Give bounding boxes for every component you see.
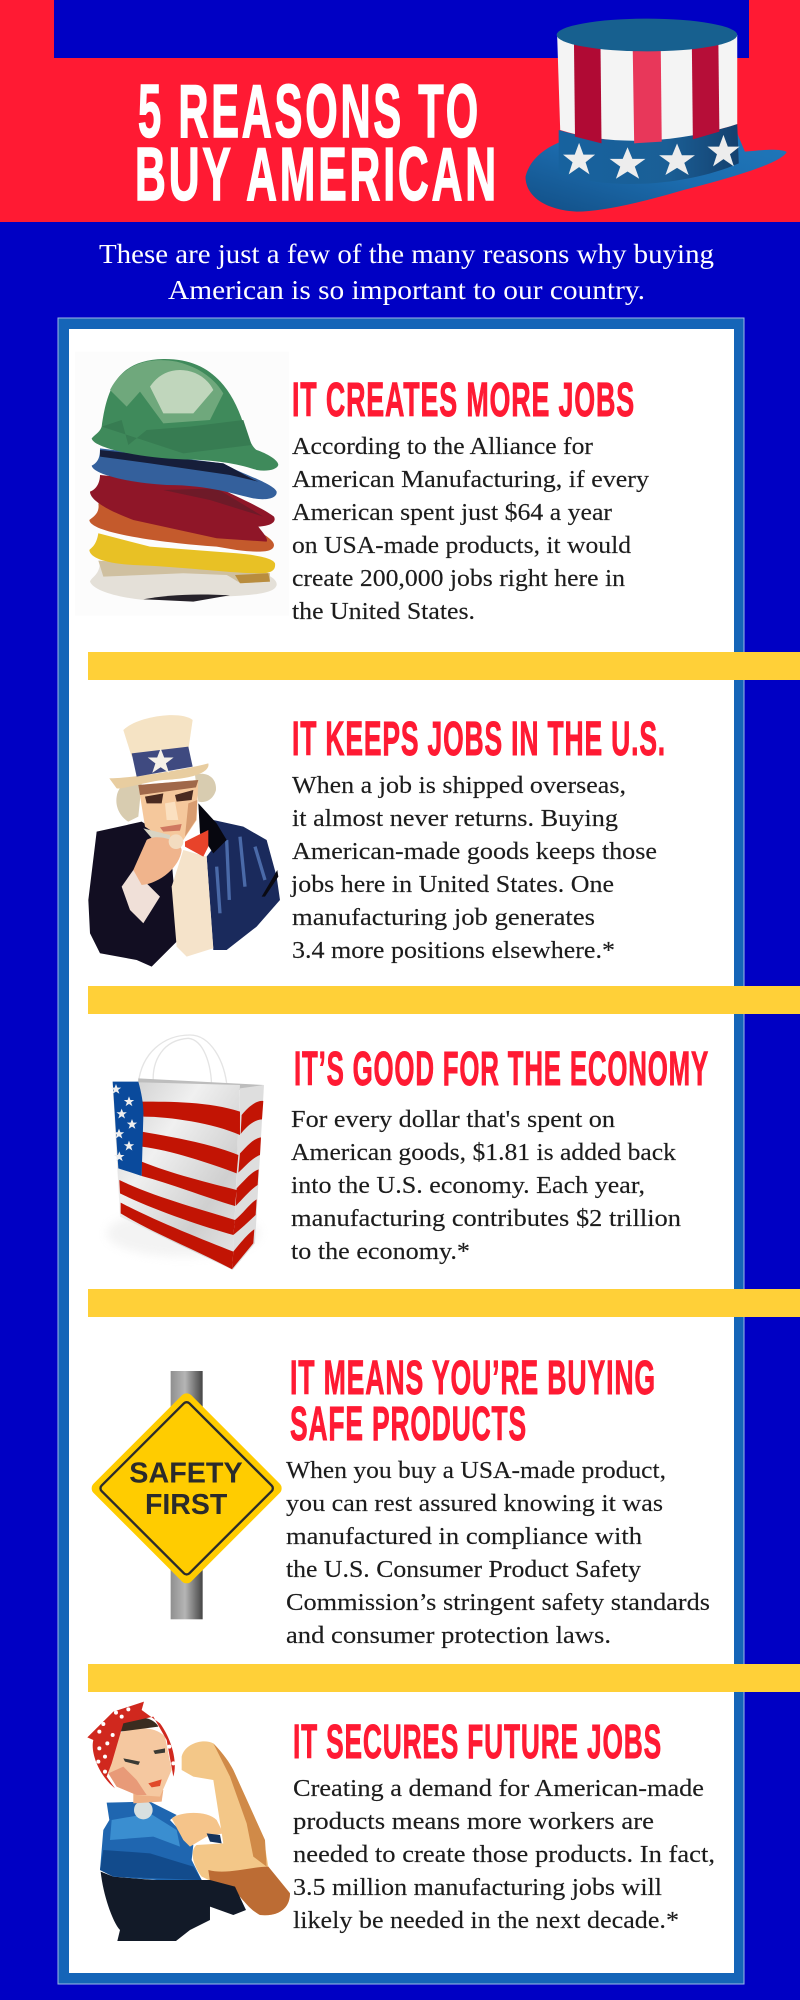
body text: to the economy.* (291, 1238, 470, 1265)
body text: American spent just $64 a year (292, 499, 612, 526)
body text: jobs here in United States. One (290, 871, 614, 898)
body text: likely be needed in the next decade.* (293, 1907, 679, 1934)
body text: Creating a demand for American-made (293, 1775, 704, 1802)
body text: create 200,000 jobs right here in (292, 565, 625, 592)
icon: safety first road sign: SAFETY (129, 1458, 243, 1490)
section 5: future jobs (87, 1702, 715, 1941)
body text: manufacturing job generates (292, 904, 595, 931)
body text: When you buy a USA-made product, (286, 1457, 666, 1484)
body text: you can rest assured knowing it was (286, 1490, 663, 1517)
section 3: economy (107, 1035, 709, 1270)
title (135, 69, 499, 216)
body text: products means more workers are (293, 1808, 654, 1835)
icon: uncle sam top hat (526, 19, 787, 212)
icon: american flag shopping bag (107, 1035, 264, 1270)
heading (290, 1352, 656, 1451)
body text: For every dollar that's spent on (291, 1106, 615, 1133)
icon: safety first road sign: FIRST (145, 1489, 228, 1521)
body text (293, 1775, 715, 1934)
intro text (99, 239, 714, 305)
title: BUY AMERICAN (135, 132, 499, 216)
panel: white content card (58, 318, 744, 1984)
body text: According to the Alliance for (292, 433, 593, 460)
body text: it almost never returns. Buying (292, 805, 618, 832)
body text: and consumer protection laws. (286, 1622, 611, 1649)
intro text: These are just a few of the many reasons why buying (99, 239, 714, 269)
icon: safety first road sign (98, 1371, 275, 1619)
section 4: safe products (98, 1352, 710, 1649)
section 2: keeps jobs (88, 713, 666, 967)
divider bar 2 (88, 986, 800, 1014)
body text: the U.S. Consumer Product Safety (286, 1556, 642, 1583)
header banner (0, 0, 800, 222)
icon: uncle sam (88, 715, 280, 967)
body text (286, 1457, 710, 1649)
body text: manufactured in compliance with (286, 1523, 642, 1550)
body text: on USA-made products, it would (292, 532, 631, 559)
icon: stacked hard hats (75, 352, 289, 616)
body text: needed to create those products. In fact, (293, 1841, 715, 1868)
body text: American goods, $1.81 is added back (291, 1139, 677, 1166)
body text: into the U.S. economy. Each year, (291, 1172, 645, 1199)
divider bar 1 (88, 652, 800, 680)
section 1: more jobs (75, 352, 650, 625)
body text: American-made goods keeps those (292, 838, 657, 865)
title: 5 REASONS TO (138, 69, 481, 153)
body text: 3.4 more positions elsewhere.* (292, 937, 615, 964)
body text: Commission’s stringent safety standards (286, 1589, 710, 1616)
heading: SAFE PRODUCTS (290, 1398, 527, 1451)
body text: When a job is shipped overseas, (292, 772, 626, 799)
divider bar 4 (88, 1664, 800, 1692)
body text: 3.5 million manufacturing jobs will (293, 1874, 662, 1901)
body text (290, 772, 657, 964)
divider bar 3 (88, 1289, 800, 1317)
body text: manufacturing contributes $2 trillion (291, 1205, 681, 1232)
body text (291, 1106, 681, 1265)
icon: rosie the riveter (87, 1702, 290, 1941)
intro text: American is so important to our country. (168, 275, 645, 305)
body text: American Manufacturing, if every (292, 466, 650, 493)
body text: the United States. (292, 598, 475, 625)
body text (292, 433, 650, 625)
